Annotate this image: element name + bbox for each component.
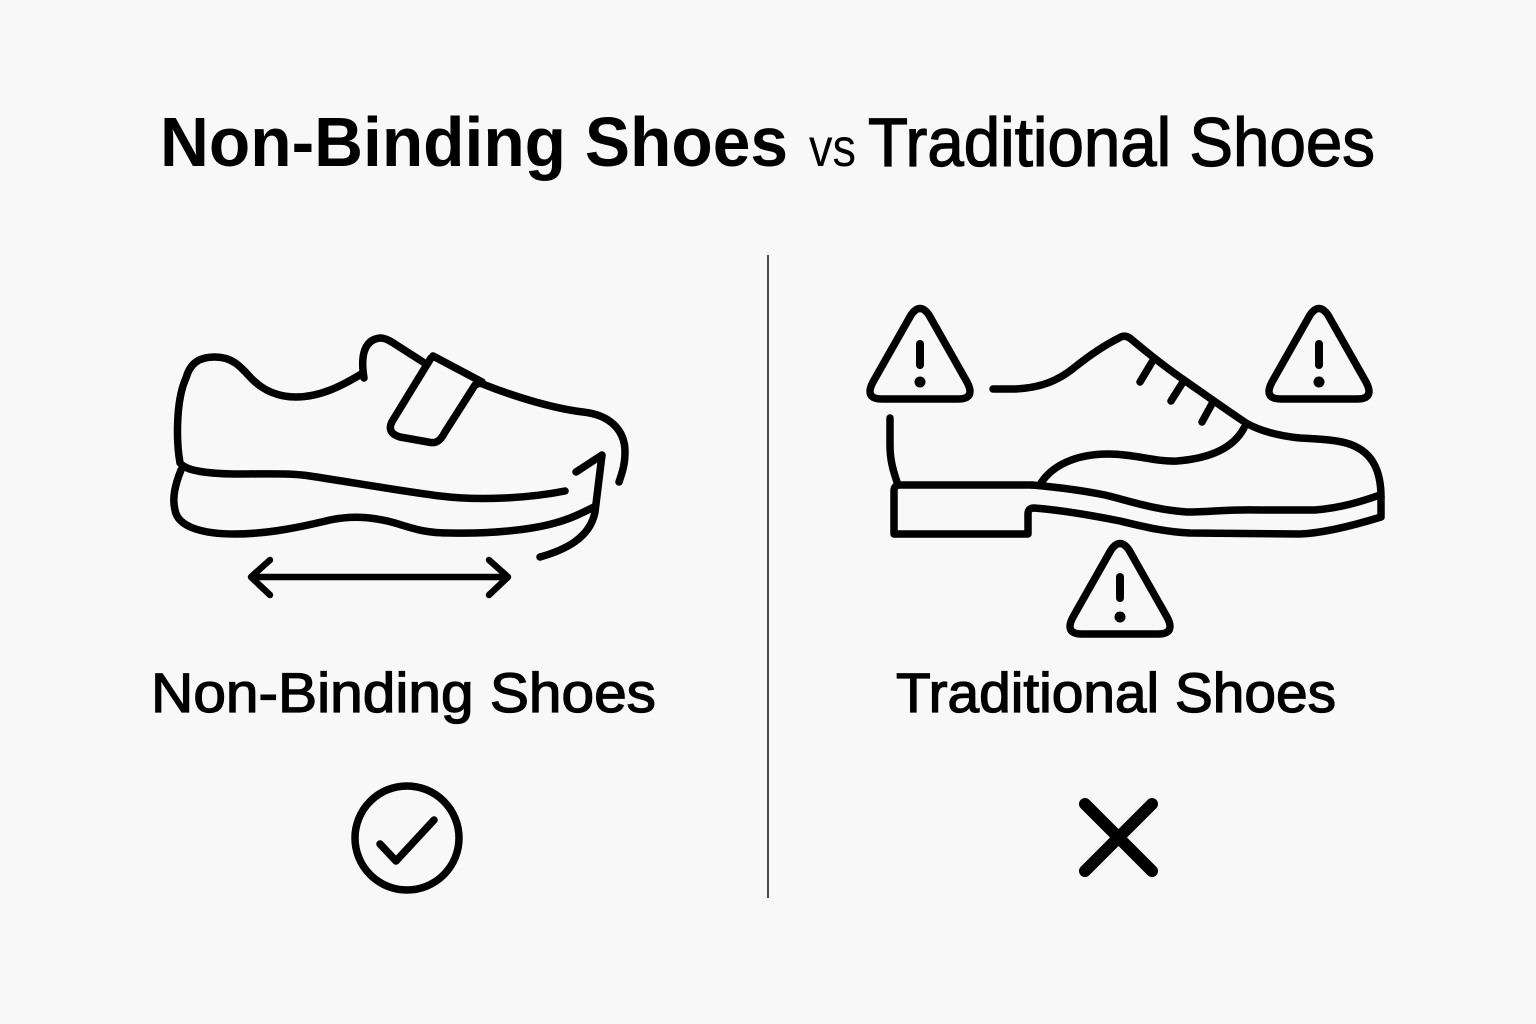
label: non-binding shoes: Non-Binding Shoes [151, 661, 656, 724]
icon: traditional dress shoe [890, 336, 1381, 534]
title: vs [809, 118, 856, 178]
panel: non-binding shoes [151, 338, 656, 890]
label: traditional shoes: Traditional Shoes [896, 661, 1336, 724]
icon: flexible velcro shoe [174, 338, 625, 557]
arrow: double-headed flex arrow [251, 560, 508, 595]
title: Non-Binding Shoes [160, 103, 788, 181]
icon: cross mark [1085, 804, 1152, 871]
title [160, 103, 1375, 181]
title: Traditional Shoes [868, 104, 1375, 181]
icon: warning triangle bottom [1070, 544, 1170, 634]
icon: warning triangle top left [870, 308, 970, 399]
icon: warning triangle top right [1269, 308, 1369, 399]
icon: check mark in circle [355, 786, 459, 890]
panel: traditional shoes [870, 308, 1381, 871]
